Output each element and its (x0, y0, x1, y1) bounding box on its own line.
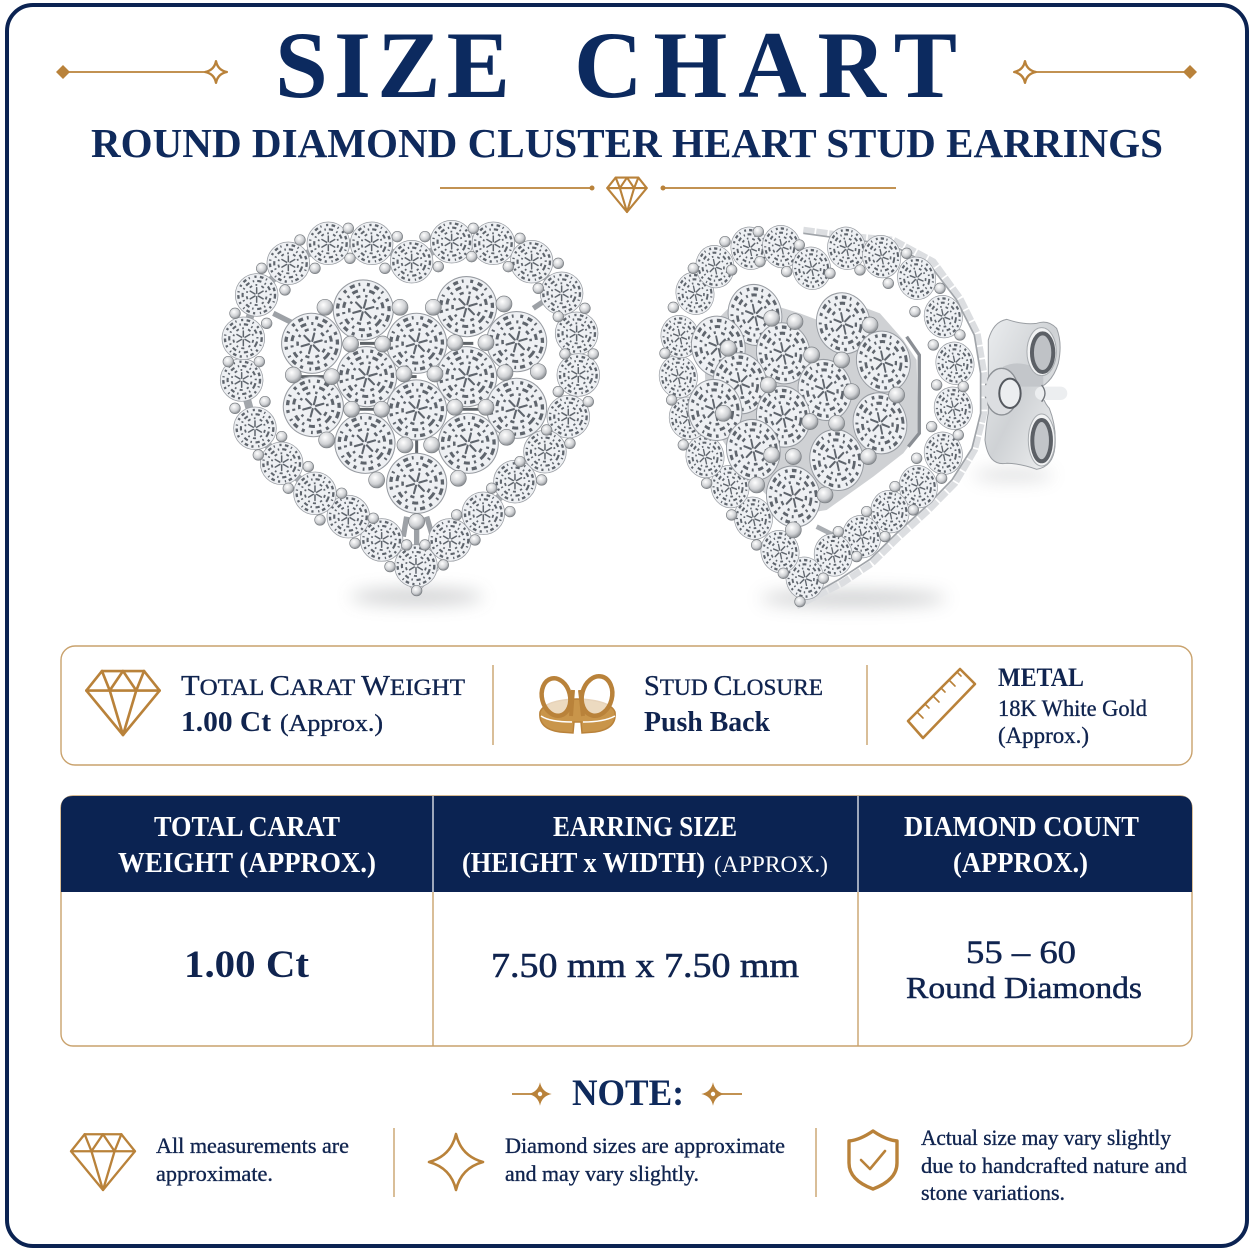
title: SIZE (275, 12, 510, 118)
carat weight value: 1.00 Ct (181, 707, 272, 738)
value: diamond count: 55 – 60 (966, 935, 1076, 971)
note 2 (429, 1133, 785, 1190)
table header (61, 796, 1192, 892)
icon: shield with check (849, 1131, 897, 1189)
title (275, 12, 957, 118)
size table (61, 796, 1192, 1046)
metal value: 18K White Gold (998, 696, 1147, 721)
carat weight label: TOTAL CARAT WEIGHT (181, 671, 465, 702)
icon: diamond (86, 671, 160, 735)
left title ornament (56, 61, 227, 83)
subtitle: ROUND DIAMOND CLUSTER HEART STUD EARRINGS (91, 120, 1163, 166)
value: earring size: 7.50 mm x 7.50 mm (491, 946, 799, 985)
icon: diamond (71, 1134, 135, 1190)
icon: four point star (429, 1134, 483, 1190)
icon: push back earring backs (538, 673, 616, 733)
header: carat weight (118, 812, 376, 879)
header: earring size (462, 812, 828, 879)
header: carat weight: WEIGHT (APPROX.) (118, 848, 376, 879)
metal approx: (Approx.) (998, 723, 1089, 748)
closure value: Push Back (644, 707, 770, 738)
right title ornament (1014, 61, 1197, 83)
header: diamond count: (APPROX.) (953, 848, 1088, 879)
icon: ruler (908, 669, 975, 738)
note 1: approximate. (156, 1161, 273, 1186)
push back (985, 319, 1061, 469)
header: earring size: (APPROX.) (714, 852, 828, 877)
note 3: stone variations. (921, 1180, 1065, 1205)
note 3: Actual size may vary slightly (921, 1125, 1171, 1150)
earring: front view (220, 220, 600, 604)
panel: specifications (61, 646, 1192, 765)
subtitle divider with diamond icon (440, 178, 896, 212)
note 3 (849, 1125, 1187, 1205)
header: diamond count: DIAMOND COUNT (904, 812, 1139, 843)
earring: angled view with push back (655, 222, 1061, 607)
header: carat weight: TOTAL CARAT (154, 812, 340, 843)
closure label: STUD CLOSURE (644, 671, 823, 702)
metal label: METAL (998, 663, 1084, 692)
carat weight approx: (Approx.) (280, 711, 383, 737)
note heading: NOTE: (572, 1073, 684, 1114)
header: earring size: (HEIGHT x WIDTH) (462, 848, 705, 879)
title: CHART (574, 12, 957, 118)
note heading (512, 1073, 742, 1114)
note 2: and may vary slightly. (505, 1161, 699, 1186)
value: diamond count: Round Diamonds (906, 970, 1142, 1005)
header: earring size: EARRING SIZE (553, 812, 737, 843)
value: diamond count (906, 935, 1142, 1005)
value: carat weight: 1.00 Ct (184, 943, 309, 986)
note 3: due to handcrafted nature and (921, 1153, 1187, 1178)
note 1: All measurements are (156, 1133, 349, 1158)
header: diamond count (904, 812, 1139, 879)
note 2: Diamond sizes are approximate (505, 1133, 785, 1158)
note 1 (71, 1133, 349, 1190)
